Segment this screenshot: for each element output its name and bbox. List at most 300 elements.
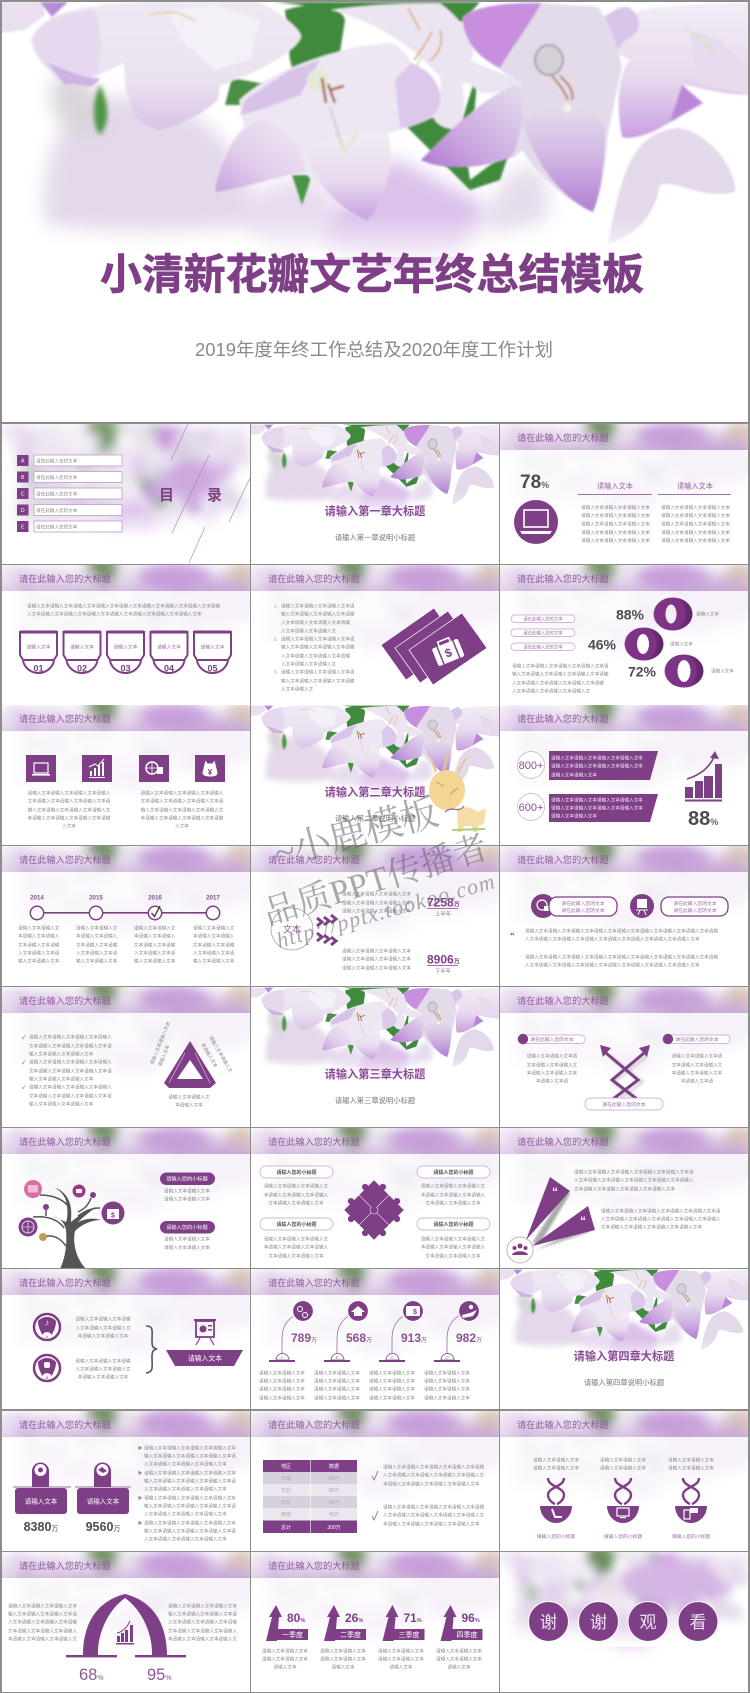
heading: 请输入第二章大标题 bbox=[325, 785, 425, 799]
heading: 请在此输入您的大标题 bbox=[268, 573, 360, 584]
heading: 请在此输入您的大标题 bbox=[19, 573, 111, 584]
column B: 请输入文本请输入文本 bbox=[314, 1386, 360, 1393]
checked text two bbox=[372, 1504, 484, 1528]
subtitled text blocks: 请输入您的小标题 bbox=[433, 1169, 474, 1176]
numbered list: 3. bbox=[274, 670, 278, 675]
right text: 本请输入文本请输入文本请输入文 bbox=[168, 1636, 237, 1643]
column B bbox=[314, 1300, 372, 1402]
panel: two amounts slide bbox=[2, 1411, 250, 1551]
text blocks: 本请输入文本请输入文本请输入文本请输 bbox=[28, 815, 111, 822]
table: 总计 bbox=[281, 1524, 291, 1531]
columns of text: 请输入文本请输入文本请输入文本 bbox=[661, 529, 730, 536]
banners: 请输入文本请输入文本 bbox=[551, 772, 597, 779]
icon: crossing arrows bbox=[600, 1045, 650, 1101]
columns of text: 请输入文本 bbox=[677, 482, 713, 490]
text blocks: 文本请输入文本请输入文本请输入文本请输入文本 bbox=[574, 1186, 675, 1193]
left text bbox=[8, 1603, 77, 1643]
stat 68%: 68% bbox=[79, 1666, 104, 1684]
icon: impossible triangle bbox=[164, 1041, 216, 1088]
rotated captions: 本请输入文本 bbox=[199, 1042, 219, 1069]
column D: 请输入文本请输入文本 bbox=[424, 1378, 470, 1385]
column D: 请输入文本请输入文本 bbox=[424, 1386, 470, 1393]
heading: 请在此输入您的大标题 bbox=[268, 854, 360, 865]
columns of text: 请输入文本请输入文本请输入文本 bbox=[581, 512, 650, 519]
quarter two bbox=[320, 1605, 366, 1671]
heading: 请在此输入您的大标题 bbox=[19, 1560, 111, 1571]
columns of text: 请输入文本请输入文本请输入文本 bbox=[581, 537, 650, 544]
bullet list: 请输入文本请输入文本请输入文本请输入文本 bbox=[144, 1520, 236, 1527]
column D: 982万 bbox=[456, 1331, 482, 1345]
list of contents items bbox=[17, 455, 122, 532]
numbered list: 请输入文本请输入文本请输入文本请 bbox=[281, 603, 355, 610]
watermark: http://pptx.tookoo.com bbox=[274, 869, 497, 953]
callout one: 请在此输入您的文本 bbox=[561, 900, 605, 907]
quote text: 请输入文本请输入文本请输入文本请输入文本请输入文本请输入文本请输入文本请输入文本请输 bbox=[525, 954, 718, 961]
checked text one: 本请输入文本请输入文本请输入文本请输入文本 bbox=[383, 1481, 480, 1488]
badge A: 请输入文本请输入文本请输 bbox=[75, 1316, 131, 1323]
badge B: B bbox=[46, 1375, 49, 1380]
first half figure: 7258万 bbox=[427, 896, 460, 910]
subtitled text blocks: 请输入文本请输入文本请输入文 bbox=[264, 1236, 329, 1243]
badge A: 本请输入文本请输入文本 bbox=[78, 1333, 129, 1340]
left text: 本请输入文本请输入文本请输入文 bbox=[8, 1636, 77, 1643]
panel: cover slide bbox=[2, 2, 748, 422]
heading: 请输入第四章大标题 bbox=[574, 1349, 674, 1363]
left note: 请输入文本请输入文本请 bbox=[527, 1053, 578, 1060]
panel: arch slide bbox=[2, 1552, 250, 1692]
bullet list: 入文本请输入文本请输入文本请输入文本 bbox=[144, 1511, 227, 1518]
quarter four: 请输入文本请输入文本 bbox=[436, 1648, 482, 1655]
subtitled text blocks: 请输入文本请输入文本请输入文 bbox=[264, 1183, 329, 1190]
left text: 入文本请输入文本请输入文本请输 bbox=[8, 1619, 77, 1626]
shields: 05 bbox=[207, 664, 218, 674]
text columns: 入文本请输入文本请 bbox=[18, 950, 60, 957]
numbered list: 输入文本请输入文本请输入文本请输 bbox=[281, 611, 355, 618]
bullet list: 输入文本请输入文本请输入文本请输入文本请 bbox=[144, 1478, 236, 1485]
heading: contents: 录 bbox=[207, 487, 222, 504]
table: 西南 bbox=[281, 1511, 291, 1518]
columns of text: 请输入文本请输入文本请输入文本 bbox=[661, 537, 730, 544]
list of contents items: B bbox=[21, 475, 25, 481]
panel: triangle slide bbox=[2, 987, 250, 1127]
bottom pill bbox=[585, 1098, 663, 1110]
timeline: 2017 bbox=[206, 894, 220, 902]
text columns: 本请输入文本请输入 bbox=[76, 933, 118, 940]
right note: 请输入文本请输入文本请 bbox=[672, 1053, 723, 1060]
bullet list: ▶ bbox=[138, 1471, 143, 1476]
right note bbox=[663, 1034, 730, 1085]
left note: 请在此输入您的文本 bbox=[530, 1036, 574, 1043]
shields bbox=[20, 630, 231, 674]
label one bbox=[160, 1172, 215, 1203]
banners: 请输入文本请输入文本请输入文本请输入文本 bbox=[551, 763, 643, 770]
text blocks: 请输入文本请输入文本请输入文本请输入 bbox=[28, 790, 111, 797]
text columns: 文本请输入文本请输 bbox=[18, 942, 60, 949]
panel: banners and growth slide bbox=[500, 705, 748, 845]
panel: DNA icons slide bbox=[500, 1411, 748, 1551]
column C: 913万 bbox=[401, 1331, 427, 1345]
illustration: tree with icons bbox=[18, 1180, 124, 1269]
bullet list bbox=[138, 1445, 236, 1543]
quarter two: 请输入文本 bbox=[332, 1664, 355, 1671]
panel: gauges slide bbox=[2, 1269, 250, 1409]
checklist: 请输入文本请输入文本请输入文本请输入 bbox=[29, 1059, 112, 1066]
trapezoid label: 请输入文本 bbox=[188, 1354, 222, 1362]
list of contents items: 请在此输入您的文本 bbox=[36, 458, 78, 464]
quarter four: 请输入文本 bbox=[448, 1664, 471, 1671]
chart: 3D rings bbox=[588, 598, 734, 688]
label one: 请输入文本请输入文本 bbox=[164, 1188, 210, 1195]
right text: 请输入文本请输入文本请输入文本 bbox=[168, 1603, 237, 1610]
right text: 输入文本请输入文本请输入文本请 bbox=[168, 1611, 237, 1618]
quote text: 请输入文本请输入文本请输入文本请输入文本请输入文本请输入文本请输入文本请输入文本请输 bbox=[525, 928, 718, 935]
chart: 3D rings: 46% bbox=[588, 636, 617, 652]
card two: 9560万 bbox=[86, 1520, 120, 1534]
text blocks: 入文本 bbox=[175, 823, 189, 830]
banners: 请输入文本请输入文本请输入文本请输入文本 bbox=[551, 805, 643, 812]
columns of text: 请输入文本请输入文本请输入文本 bbox=[581, 504, 650, 511]
bullet list: 输入文本请输入文本请输入文本请输入文本请 bbox=[144, 1503, 236, 1510]
thank-you circles bbox=[528, 1602, 718, 1642]
column B: 请输入文本请输入文本 bbox=[314, 1378, 360, 1385]
columns of text: 请输入文本请输入文本请输入文本 bbox=[661, 520, 730, 528]
heading: 请在此输入您的大标题 bbox=[19, 1419, 111, 1430]
badge B bbox=[34, 1355, 131, 1381]
spikes bbox=[526, 1177, 595, 1250]
text blocks: 请输入文本请输入文本请输入文本请输入文本请输入文本请 bbox=[574, 1169, 694, 1176]
checked text two: 请输入文本请输入文本请输入文本请输入文本请输 bbox=[383, 1504, 484, 1511]
panel: puzzle slide bbox=[251, 1128, 499, 1268]
table: 40万 bbox=[329, 1512, 339, 1518]
quarter three: 71% bbox=[404, 1611, 422, 1625]
card one bbox=[13, 1462, 71, 1534]
panel: rings slide: 请在此输入您的文本 bbox=[523, 644, 563, 650]
panel: half-year figures slide bbox=[251, 846, 499, 986]
checklist: 请输入文本请输入文本请输入文本请输入 bbox=[29, 1084, 112, 1091]
second half figure bbox=[342, 948, 460, 975]
checked text two: 入文本请输入文本请输入文本请输入文本请输入文 bbox=[383, 1512, 484, 1519]
list of contents items: 请在此输入您的文本 bbox=[36, 524, 78, 530]
numbered list: 输入文本请输入文本请输入文本请输 bbox=[281, 644, 355, 651]
banners: 请输入文本请输入文本请输入文本请输入文本 bbox=[551, 755, 643, 762]
subtitle: 请输入第二章说明小标题 bbox=[335, 814, 416, 823]
text block: 请输入文本请输入文本请输入文本请输入文本请 bbox=[512, 663, 609, 670]
heading: 请输入第一章大标题 bbox=[325, 504, 425, 518]
text columns: 入文本请输入文本请 bbox=[193, 950, 235, 957]
text blocks: 请输入文本请输入文本请输入文本请输入文本请输入文本请 bbox=[601, 1208, 721, 1215]
heading: 请在此输入您的大标题 bbox=[268, 1419, 360, 1430]
subtitle: 2019年度年终工作总结及2020年度工作计划 bbox=[195, 340, 553, 360]
image: lilac flowers bbox=[0, 2, 750, 262]
right text: 文本请输入文本请输入文本请输入 bbox=[168, 1628, 237, 1635]
heading: 请在此输入您的大标题 bbox=[517, 573, 609, 584]
badge A bbox=[34, 1314, 131, 1340]
banners: 请输入文本请输入文本请输入文本请输入文本 bbox=[551, 797, 643, 804]
heading: 请输入第三章大标题 bbox=[325, 1067, 425, 1081]
quarter one: 请输入文本请输入文本 bbox=[262, 1648, 308, 1655]
panel: table slide bbox=[251, 1411, 499, 1551]
text block: 入文本请输入文本请输入文本请输入文 bbox=[512, 688, 591, 695]
text block: 入文本请输入文本请输入文本请输入文本请输 bbox=[512, 680, 604, 687]
columns of text: 请输入文本请输入文本请输入文本 bbox=[661, 512, 730, 519]
checked text one bbox=[372, 1464, 484, 1488]
numbered list: 请输入文本请输入文本请输入文本请 bbox=[281, 636, 355, 643]
text block bbox=[27, 603, 220, 618]
column two bbox=[600, 1457, 646, 1540]
panel: rings slide: 请在此输入您的文本 bbox=[523, 630, 563, 636]
rotated captions bbox=[148, 1020, 234, 1074]
stat 78%: 78% bbox=[520, 472, 549, 493]
illustration: deer mascot bbox=[429, 752, 486, 832]
quarter one: 80% bbox=[287, 1611, 305, 1625]
checked text one: 入文本请输入文本请输入文本请输入文本请输入文 bbox=[383, 1472, 484, 1479]
column C: C bbox=[390, 1355, 394, 1360]
shields: 02 bbox=[77, 664, 87, 674]
column C: 请输入文本请输入文本 bbox=[369, 1395, 415, 1402]
numbered list: 入文本请输入文本请输入文 bbox=[281, 628, 337, 635]
label one: 请输入您的小标题 bbox=[166, 1174, 208, 1182]
shields: 03 bbox=[120, 664, 131, 674]
card two bbox=[75, 1462, 131, 1534]
heading: 请在此输入您的大标题 bbox=[19, 1136, 111, 1147]
stat 95%: 95% bbox=[147, 1666, 172, 1684]
spikes: “ bbox=[552, 1185, 558, 1199]
title: 小清新花瓣文艺年终总结模板 bbox=[100, 251, 644, 298]
text block bbox=[512, 663, 609, 695]
badge B: 请输入文本请输入文本请输 bbox=[75, 1358, 131, 1365]
label two: 请输入文本请输入文本 bbox=[164, 1244, 210, 1251]
bullet list: 入文本请输入文本请输入文本请输入文本 bbox=[144, 1486, 227, 1493]
icon: puzzle bbox=[338, 1174, 410, 1246]
list of contents items: 请在此输入您的文本 bbox=[36, 490, 78, 498]
badge A: ♪ bbox=[45, 1318, 49, 1327]
left note: 本请输入文本请 bbox=[536, 1078, 568, 1085]
text blocks: 入文本请输入文本请输入文本请输入文本请输入文本请输入 bbox=[601, 1216, 721, 1223]
icon: arch bbox=[66, 1594, 186, 1657]
text columns: 入文本请输入文本请 bbox=[76, 950, 118, 957]
column D: 请输入文本请输入文本 bbox=[424, 1395, 470, 1402]
heading: contents bbox=[159, 487, 222, 504]
bullet list: ▶ bbox=[138, 1496, 143, 1501]
column one: 请输入文本请输入文本 bbox=[533, 1465, 579, 1472]
badges bbox=[518, 752, 544, 820]
right note: 请在此输入您的文本 bbox=[675, 1036, 719, 1043]
checked text two: 本请输入文本请输入文本请输入文本请输入文本 bbox=[383, 1521, 480, 1528]
rotated captions: 请输入文本 bbox=[156, 1043, 172, 1068]
subtitled text blocks: 请输入您的小标题 bbox=[433, 1221, 474, 1228]
list of contents items: D bbox=[21, 508, 25, 514]
panel: tree slide bbox=[2, 1128, 250, 1268]
panel: timeline slide bbox=[2, 846, 250, 986]
subtitle: 请输入第三章说明小标题 bbox=[335, 1096, 416, 1105]
chart: 3D rings: 88% bbox=[616, 606, 645, 622]
panel: thank-you slide bbox=[500, 1552, 748, 1692]
quarter three: 三季度 bbox=[398, 1630, 420, 1639]
bullet list: 入文本请输入文本请输入文本请输入文本 bbox=[144, 1536, 227, 1543]
panel: laptop stat slide bbox=[500, 424, 748, 564]
illustration: tree with icons: $ bbox=[111, 1212, 115, 1220]
bullet list: 输入文本请输入文本请输入文本请输入文本请 bbox=[144, 1453, 236, 1460]
column three: 请输入文本请输入文本 bbox=[668, 1465, 714, 1472]
table bbox=[263, 1460, 357, 1533]
list of contents items: E bbox=[21, 525, 25, 531]
shields: 请输入文本 bbox=[114, 644, 138, 650]
columns of text: 请输入文本请输入文本请输入文本 bbox=[661, 504, 730, 511]
icon: team bbox=[507, 1237, 533, 1263]
bullet list: 请输入文本请输入文本请输入文本请输入文本 bbox=[144, 1445, 236, 1452]
panel: quarterly arrows slide bbox=[251, 1552, 499, 1692]
panel: rings slide: 请在此输入您的文本 bbox=[523, 616, 563, 622]
column A bbox=[259, 1300, 317, 1402]
quarter two: 26% bbox=[345, 1611, 363, 1625]
right text bbox=[168, 1603, 237, 1643]
text columns: 请输入文本请输入文 bbox=[18, 925, 60, 932]
left note: 本请输入文本请输入文本 bbox=[527, 1070, 578, 1077]
heading: 请在此输入您的大标题 bbox=[19, 1277, 111, 1288]
bullet list: ▶ bbox=[138, 1446, 143, 1451]
text block: 输入文本请输入文本请输入文本请输入文本请输 bbox=[512, 671, 609, 678]
badge A: A bbox=[46, 1334, 49, 1339]
circle label: 文本 bbox=[283, 924, 301, 934]
quarter one: 请输入文本请输入文本 bbox=[262, 1656, 308, 1663]
quarter four: 四季度 bbox=[456, 1630, 478, 1639]
column three bbox=[668, 1457, 714, 1540]
chart: 3D rings: 请输入文本 bbox=[696, 610, 719, 618]
column B: 568万 bbox=[346, 1331, 372, 1345]
subtitled text blocks: 本请输入文本请输入文本请输入 bbox=[421, 1244, 486, 1251]
column B: 请输入文本请输入文本 bbox=[314, 1395, 360, 1402]
timeline: 2014 bbox=[30, 894, 44, 902]
circle label bbox=[271, 908, 313, 950]
callout two: 请在此输入您的文本 bbox=[673, 900, 717, 907]
quarter three: 请输入文本 bbox=[390, 1664, 413, 1671]
text block: 入文本请输入文本请输入文本请输入文本请输入文本请输入文本请输入文本请输入文本 bbox=[27, 611, 202, 618]
text columns: 输入文本请输入文本 bbox=[134, 958, 176, 965]
table: 地区 bbox=[281, 1463, 291, 1470]
panel: callouts slide bbox=[500, 846, 748, 986]
text columns: 输入文本请输入文本 bbox=[76, 958, 118, 965]
timeline: 2016 bbox=[148, 894, 162, 902]
watermark: 品质PPT传播者 bbox=[259, 828, 492, 933]
panel: contents slide bbox=[2, 424, 250, 564]
card two: 请输入文本 bbox=[87, 1496, 120, 1506]
column A: 请输入文本请输入文本 bbox=[259, 1386, 305, 1393]
checklist bbox=[22, 1034, 112, 1108]
left text: 文本请输入文本请输入文本请输入 bbox=[8, 1628, 77, 1635]
heading: 请在此输入您的大标题 bbox=[19, 854, 111, 865]
table: 数据 bbox=[329, 1463, 339, 1470]
table: 90万 bbox=[329, 1500, 339, 1506]
quarter four bbox=[436, 1605, 482, 1671]
badges: 800+ bbox=[519, 760, 543, 772]
subtitled text blocks: 文本请输入文本请输入文本 bbox=[268, 1200, 324, 1207]
first half figure: 请输入文本请输入文本请输入文本 bbox=[342, 908, 411, 915]
text blocks: 请输入文本请输入文本请输入文本请输入 bbox=[141, 790, 224, 797]
thank-you circles: 观 bbox=[640, 1613, 656, 1632]
text blocks: 文本请输入文本请输入文本请输入文本请输入文本 bbox=[601, 1224, 702, 1231]
heading: 请在此输入您的大标题 bbox=[19, 713, 111, 724]
bullet list: 请输入文本请输入文本请输入文本请输入文本 bbox=[144, 1470, 236, 1477]
first half figure: 请输入文本请输入文本请输入文本 bbox=[342, 891, 411, 898]
column A: 789万 bbox=[291, 1331, 317, 1345]
quarter three: 请输入文本请输入文本 bbox=[378, 1656, 424, 1663]
shields: 请输入文本 bbox=[157, 644, 181, 650]
subtitled text blocks: 请输入文本请输入文本请输入文 bbox=[421, 1183, 486, 1190]
heading: 请在此输入您的大标题 bbox=[517, 432, 609, 443]
subtitled text blocks: 文本请输入文本请输入文本 bbox=[268, 1253, 324, 1260]
timeline bbox=[30, 894, 220, 920]
label two: 请输入您的小标题 bbox=[166, 1223, 208, 1231]
icon: presentation board bbox=[194, 1319, 216, 1345]
column A: A bbox=[280, 1355, 284, 1360]
table: 华北 bbox=[281, 1487, 291, 1494]
second half figure: 下半年 bbox=[435, 967, 452, 975]
chart: growth bars bbox=[685, 751, 722, 802]
numbered list: 入文本请输入文本请输入文本请输 bbox=[281, 619, 350, 626]
column A: 请输入文本请输入文本 bbox=[259, 1378, 305, 1385]
columns of text: 请输入文本 bbox=[597, 482, 633, 490]
thank-you circles: 谢 bbox=[590, 1613, 607, 1632]
text columns: 输入文本请输入文本 bbox=[18, 958, 60, 965]
numbered list: 1. bbox=[274, 604, 278, 609]
icons: ¥ bbox=[208, 768, 213, 777]
panel: four figures slide bbox=[251, 1269, 499, 1409]
heading: 请在此输入您的大标题 bbox=[19, 995, 111, 1006]
shields: 04 bbox=[164, 664, 174, 674]
subtitled text blocks: 请输入您的小标题 bbox=[276, 1221, 317, 1228]
panel: spikes slide bbox=[500, 1128, 748, 1268]
bullet list: 请输入文本请输入文本请输入文本请输入文本 bbox=[144, 1495, 236, 1502]
text columns: 文本请输入文本请输 bbox=[134, 942, 176, 949]
bullet list: ▶ bbox=[138, 1521, 143, 1526]
column three: 请输入您的小标题 bbox=[672, 1533, 710, 1540]
panel: cards slide bbox=[251, 565, 499, 705]
numbered list: 入文本请输入文 bbox=[281, 686, 314, 693]
panel: chapter four slide bbox=[500, 1269, 748, 1409]
label one: 请输入文本请输入文本 bbox=[164, 1196, 210, 1203]
card one: 8380万 bbox=[24, 1520, 58, 1534]
badges: 600+ bbox=[519, 802, 543, 814]
panel: chapter three slide bbox=[251, 987, 499, 1127]
watermark bbox=[259, 792, 497, 953]
chart: 3D rings: 请输入文本 bbox=[711, 668, 734, 674]
right note: 本请输入文本请 bbox=[681, 1078, 713, 1085]
subtitled text blocks bbox=[260, 1166, 490, 1260]
quarter one: 请输入文本 bbox=[274, 1664, 297, 1671]
list of contents items: C bbox=[21, 492, 25, 498]
shields: 01 bbox=[33, 664, 44, 674]
panel: five shields slide bbox=[2, 565, 250, 705]
banners: 请输入文本请输入文本 bbox=[551, 813, 597, 820]
text blocks: 文本请输入文本请输入文本请输入文本请 bbox=[141, 798, 224, 805]
heading: 请在此输入您的大标题 bbox=[517, 713, 609, 724]
subtitle: 请输入第一章说明小标题 bbox=[335, 533, 416, 542]
subtitle: 请输入第四章说明小标题 bbox=[584, 1378, 665, 1387]
left note bbox=[518, 1034, 585, 1085]
column two: 请输入您的小标题 bbox=[604, 1533, 642, 1540]
quote text: “ bbox=[510, 931, 514, 941]
right note: 本请输入文本请输入文本 bbox=[672, 1070, 723, 1077]
text columns: 文本请输入文本请输 bbox=[76, 942, 118, 949]
heading: 请在此输入您的大标题 bbox=[517, 1136, 609, 1147]
numbered list: 入文本请输入文本请输入文 bbox=[281, 661, 337, 668]
text columns: 请输入文本请输入文 bbox=[76, 925, 118, 932]
text blocks bbox=[28, 790, 224, 830]
bullet list: 输入文本请输入文本请输入文本请输入文本请 bbox=[144, 1528, 236, 1535]
numbered list: 入文本请输入文本请输入文本请输 bbox=[281, 653, 350, 660]
text columns: 文本请输入文本请输 bbox=[193, 942, 235, 949]
quarter one bbox=[262, 1605, 308, 1671]
